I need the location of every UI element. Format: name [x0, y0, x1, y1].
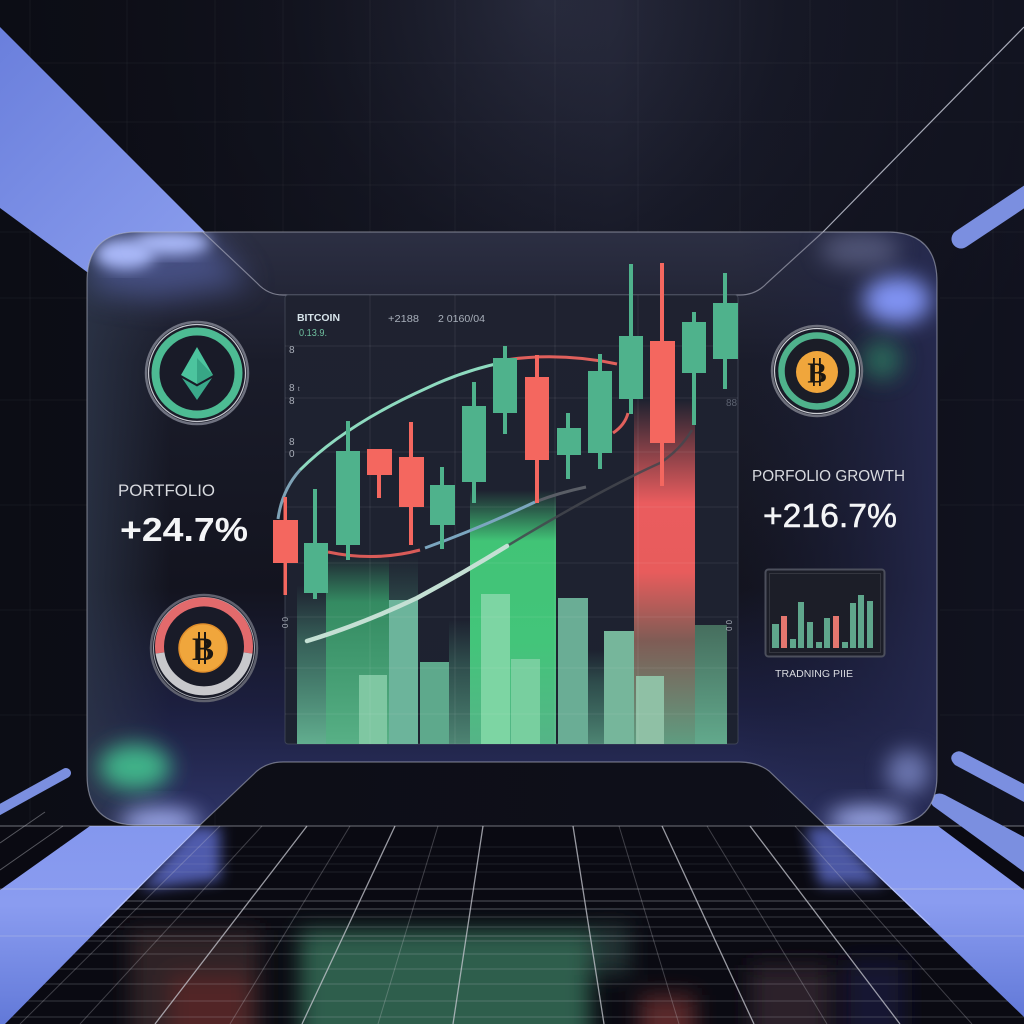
volume bars	[297, 400, 727, 744]
blue pill: lower left	[0, 773, 66, 815]
floor beam left	[0, 826, 200, 1024]
mini chart label: TRADNING PIIE	[775, 668, 853, 680]
icon: ethereum coin	[146, 322, 248, 424]
floor bright horizontals	[0, 826, 1024, 936]
axis labels: t	[298, 387, 300, 393]
candlesticks	[273, 263, 738, 599]
axis labels: 8	[289, 437, 295, 448]
axis labels: 00	[724, 620, 733, 632]
text: portfolio	[118, 482, 248, 548]
icon: bitcoin gauge	[151, 595, 257, 701]
icon: bitcoin gauge: B	[192, 632, 214, 668]
white growth line	[307, 546, 507, 641]
blue light beam: top left	[0, 27, 283, 312]
floor reflections	[130, 826, 905, 1024]
axis labels: 8	[289, 383, 295, 394]
faint growth line	[507, 430, 692, 546]
floor perspective grid	[0, 812, 972, 1024]
chart header labels: 0.13.9.	[299, 328, 327, 339]
blue pill: lower right lower	[931, 794, 1024, 872]
chart header labels	[297, 313, 485, 339]
diagonal line: top right	[823, 27, 1024, 232]
floor beam right	[826, 826, 1024, 1017]
mini chart	[766, 570, 884, 656]
text: portfolio growth	[752, 468, 905, 534]
axis labels: 88	[726, 398, 737, 409]
text: portfolio growth: PORFOLIO GROWTH	[752, 468, 905, 485]
icon: bitcoin coin right	[772, 326, 862, 416]
axis labels	[281, 345, 737, 632]
panel glows	[92, 231, 931, 836]
text: portfolio: PORTFOLIO	[118, 482, 215, 500]
chart grid	[285, 295, 738, 744]
text: portfolio growth: +216.7%	[763, 497, 897, 534]
blue pill: upper right	[961, 193, 1024, 239]
trend ellipse	[278, 357, 628, 557]
glass panel	[87, 231, 937, 836]
chart header labels: BITCOIN	[297, 313, 340, 324]
blue pill: lower right upper	[951, 751, 1024, 802]
text: portfolio: +24.7%	[120, 511, 248, 548]
icon: bitcoin coin right: B	[807, 358, 827, 390]
axis labels: 00	[281, 616, 290, 628]
axis labels: 8	[289, 396, 295, 407]
floor beam edge highlights	[100, 826, 930, 926]
chart panel	[273, 263, 738, 744]
axis labels: 8	[289, 345, 295, 356]
chart header labels: +2188	[388, 314, 419, 325]
floor horizontal grid	[0, 847, 1024, 1017]
floor	[0, 812, 1024, 1024]
axis labels: 0	[289, 449, 295, 460]
chart header labels: 2 0160/04	[438, 314, 485, 325]
